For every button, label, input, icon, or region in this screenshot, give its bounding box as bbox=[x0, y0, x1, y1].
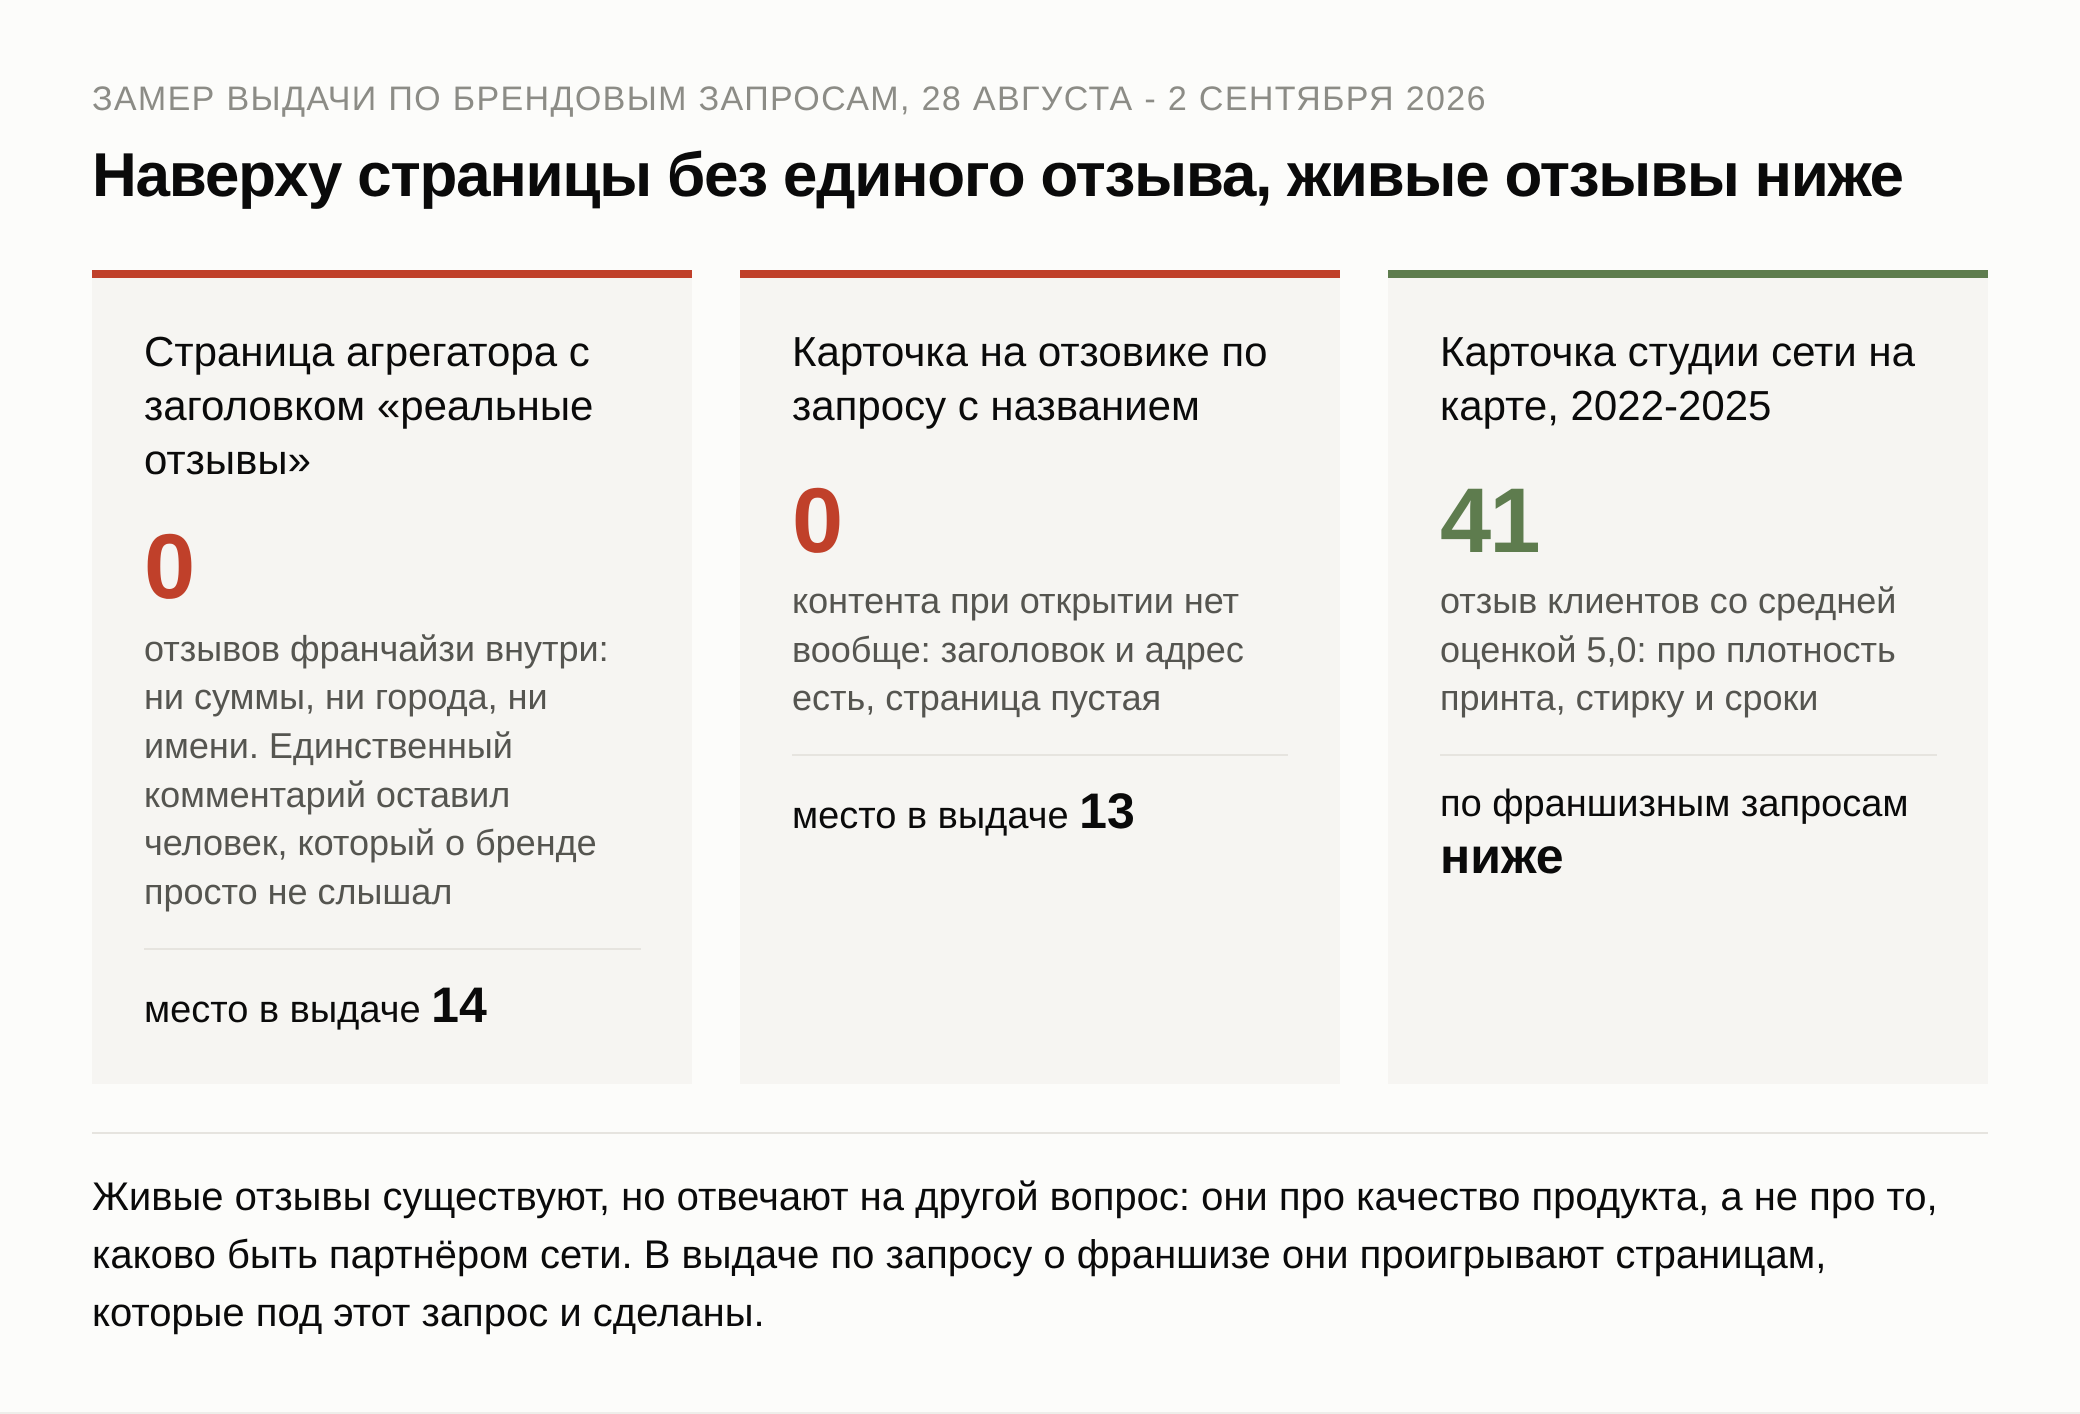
conclusion text bbox=[92, 1175, 1938, 1335]
eyebrow: ЗАМЕР ВЫДАЧИ ПО БРЕНДОВЫМ ЗАПРОСАМ, 28 АВГУСТА - 2 СЕНТЯБРЯ 2026 bbox=[92, 80, 1487, 118]
description bbox=[792, 580, 1244, 718]
description: просто не слышал bbox=[144, 871, 452, 912]
big number: 41 bbox=[1440, 470, 1539, 572]
search position: место в выдаче 14 bbox=[144, 977, 487, 1033]
search position: по франшизным запросам bbox=[1440, 782, 1909, 824]
panel heading: заголовком «реальные bbox=[144, 382, 593, 429]
search position: место в выдаче 13 bbox=[792, 783, 1135, 839]
panel: studio map card bbox=[1388, 270, 1988, 1084]
description: есть, страница пустая bbox=[792, 677, 1161, 718]
panel heading: Карточка на отзовике по bbox=[792, 328, 1267, 375]
panel heading: карте, 2022-2025 bbox=[1440, 382, 1771, 429]
description: контента при открытии нет bbox=[792, 580, 1239, 621]
search position: ниже bbox=[1440, 828, 1564, 884]
panel heading: запросу с названием bbox=[792, 382, 1200, 429]
description: ни суммы, ни города, ни bbox=[144, 676, 548, 717]
panel: aggregator page bbox=[92, 270, 692, 1084]
title: Наверху страницы без единого отзыва, живые отзывы ниже bbox=[92, 141, 1903, 210]
conclusion text: каково быть партнёром сети. В выдаче по запросу о франшизе они проигрывают страницам, bbox=[92, 1233, 1826, 1277]
panel heading: Карточка студии сети на bbox=[1440, 328, 1915, 375]
panel: review site card bbox=[740, 270, 1340, 1084]
panel heading bbox=[144, 328, 593, 483]
conclusion text: Живые отзывы существуют, но отвечают на другой вопрос: они про качество продукта, а не про то, bbox=[92, 1175, 1938, 1219]
panel heading bbox=[1440, 328, 1915, 429]
description bbox=[1440, 580, 1896, 718]
panel heading bbox=[792, 328, 1267, 429]
description: отзыв клиентов со средней bbox=[1440, 580, 1896, 621]
big number: 0 bbox=[792, 470, 841, 572]
description: человек, который о бренде bbox=[144, 822, 597, 863]
description bbox=[144, 628, 609, 912]
description: принта, стирку и сроки bbox=[1440, 677, 1818, 718]
panel heading: Страница агрегатора с bbox=[144, 328, 590, 375]
panel heading: отзывы» bbox=[144, 436, 311, 483]
big number: 0 bbox=[144, 516, 193, 618]
description: оценкой 5,0: про плотность bbox=[1440, 629, 1896, 670]
conclusion text: которые под этот запрос и сделаны. bbox=[92, 1291, 765, 1335]
description: комментарий оставил bbox=[144, 774, 510, 815]
description: отзывов франчайзи внутри: bbox=[144, 628, 609, 669]
description: имени. Единственный bbox=[144, 725, 513, 766]
description: вообще: заголовок и адрес bbox=[792, 629, 1244, 670]
search position bbox=[1440, 782, 1909, 884]
